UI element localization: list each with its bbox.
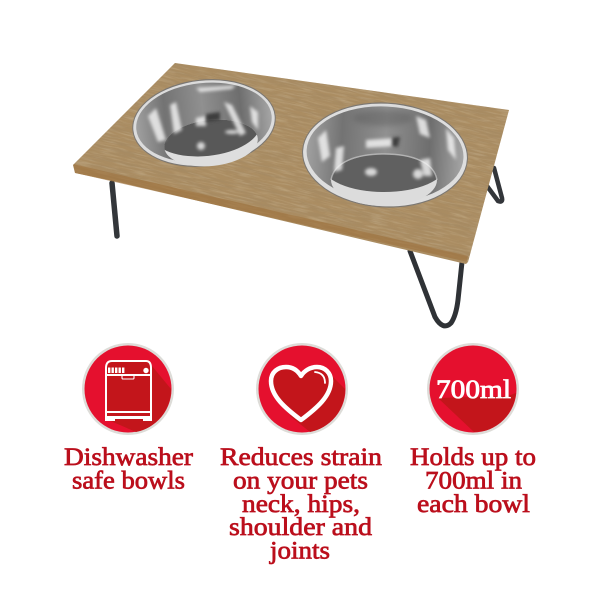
caption: reduces strain: Reduces strain bbox=[220, 444, 383, 471]
caption: dishwasher safe bowls bbox=[64, 444, 194, 494]
caption: reduces strain: shoulder and bbox=[229, 514, 373, 541]
caption: dishwasher safe bowls: Dishwasher bbox=[64, 444, 194, 471]
badge: capacity bbox=[427, 343, 519, 435]
icon shadow bbox=[106, 366, 171, 432]
back right leg bbox=[487, 168, 502, 202]
left bowl floor bbox=[164, 120, 258, 166]
badge: reduces strain bbox=[256, 343, 348, 435]
icon shadow bbox=[438, 393, 516, 432]
product photo: raised wooden stand with two steel bowls bbox=[73, 63, 509, 328]
caption: holds up to 700ml bbox=[410, 444, 536, 518]
badge: dishwasher safe bbox=[82, 343, 174, 435]
icon: dishwasher bbox=[105, 361, 152, 421]
capacity value: 700ml bbox=[436, 375, 511, 404]
caption: holds up to 700ml: 700ml in bbox=[425, 468, 523, 494]
front hairpin leg bbox=[410, 251, 462, 326]
icon shadow bbox=[290, 366, 345, 432]
right bowl bbox=[299, 98, 471, 212]
caption: holds up to 700ml: each bowl bbox=[417, 491, 530, 518]
wooden board bbox=[73, 63, 509, 264]
caption: reduces strain: neck, hips, bbox=[242, 491, 360, 518]
caption: reduces strain bbox=[220, 444, 383, 564]
back left leg bbox=[112, 183, 117, 236]
caption: holds up to 700ml: Holds up to bbox=[410, 444, 536, 471]
right bowl floor bbox=[330, 153, 438, 206]
left bowl bbox=[132, 79, 276, 167]
caption: reduces strain: joints bbox=[269, 538, 330, 564]
icon: heart bbox=[271, 367, 331, 420]
caption: reduces strain: on your pets bbox=[233, 468, 368, 494]
caption: dishwasher safe bowls: safe bowls bbox=[72, 468, 185, 494]
